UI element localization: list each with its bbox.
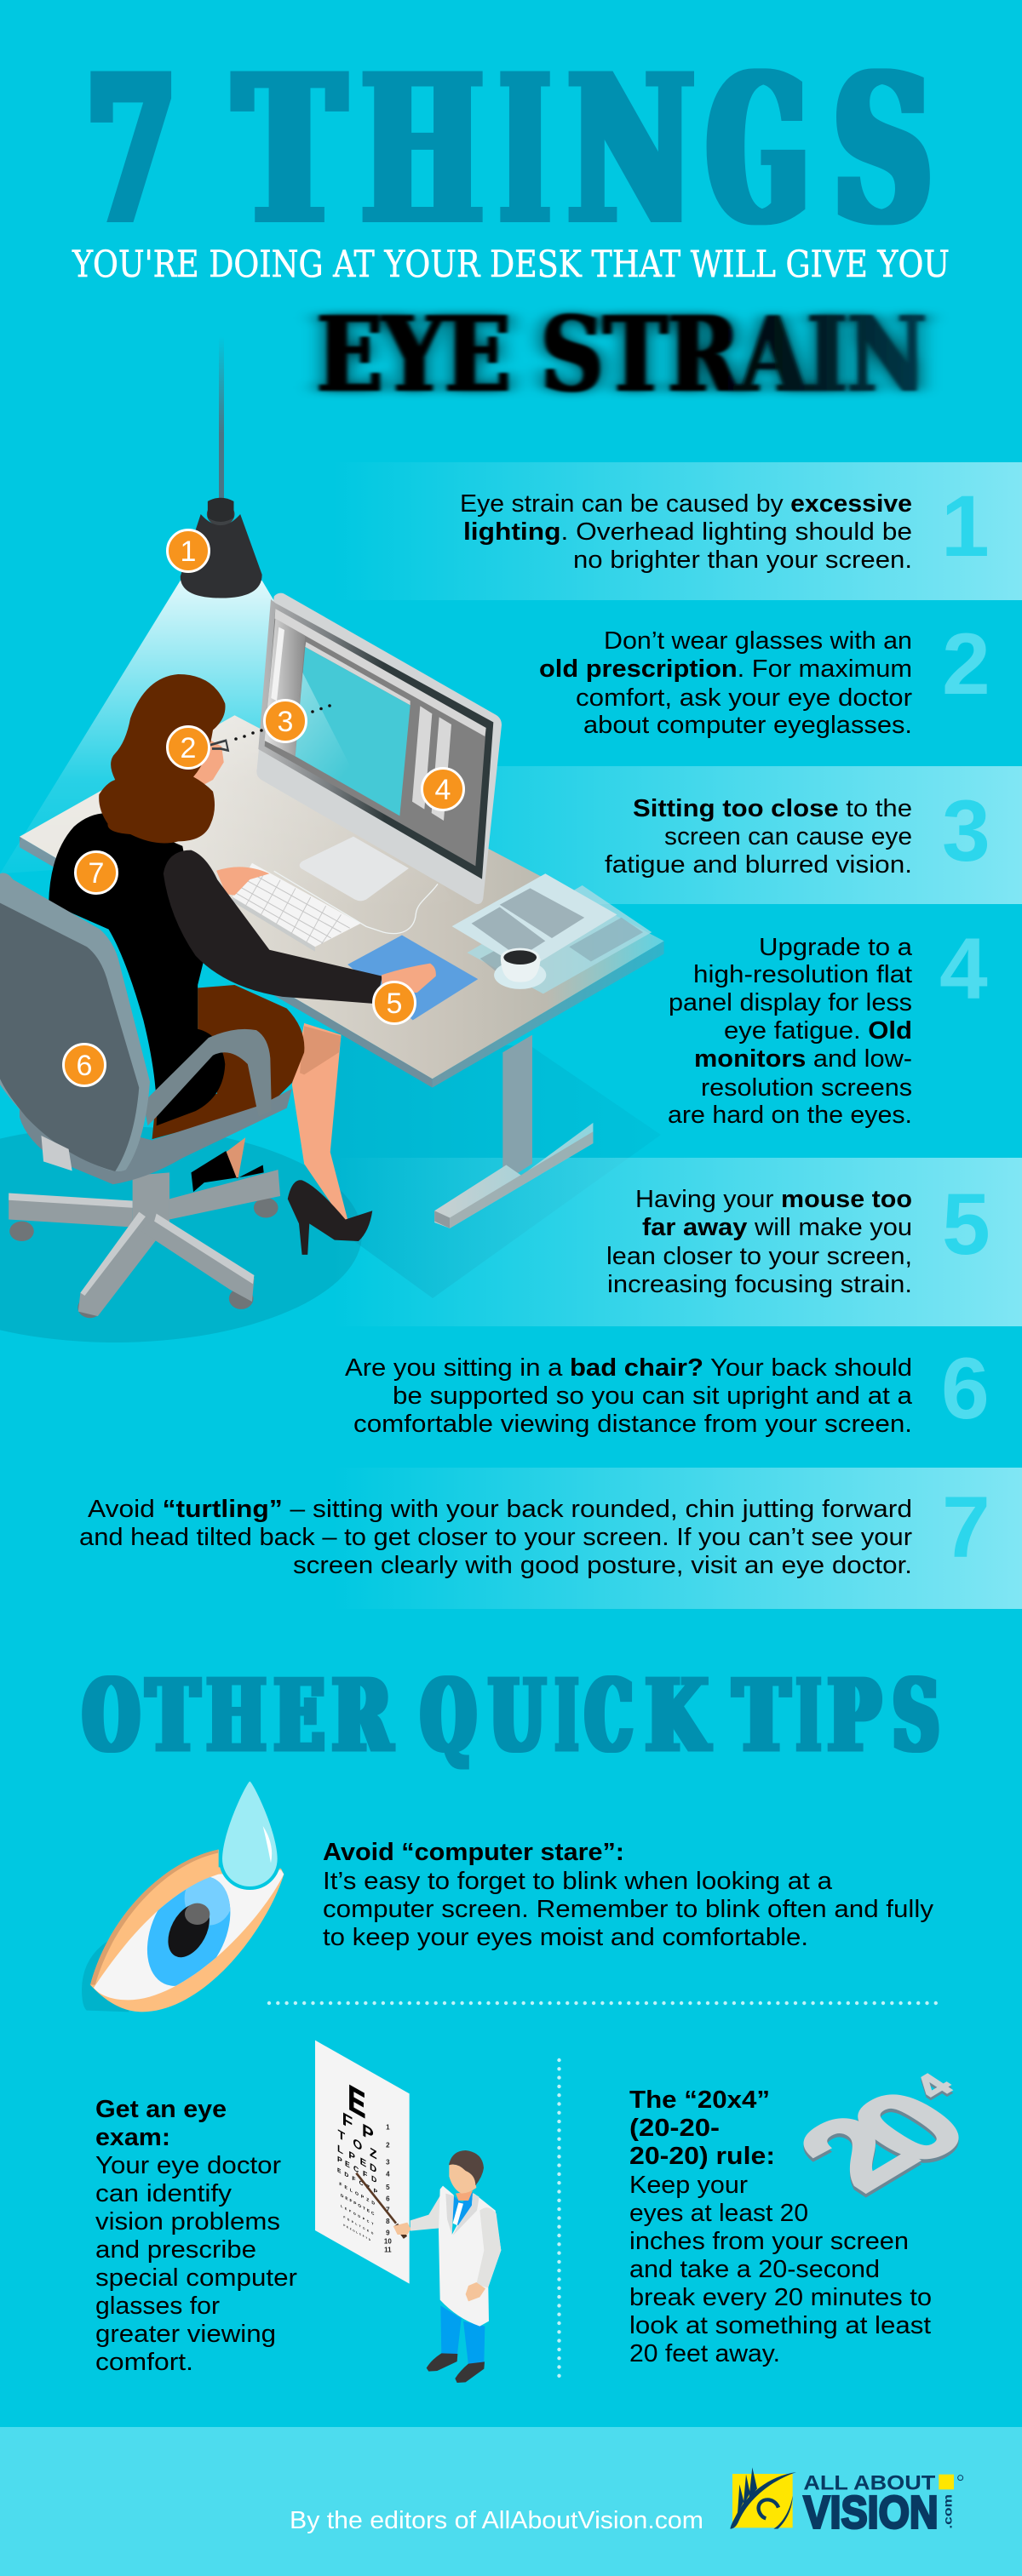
doctor xyxy=(356,2150,501,2383)
panel: tip 4: Upgrade to a xyxy=(759,934,913,961)
badge 5 xyxy=(373,982,416,1023)
panel: tip 2: Don’t wear glasses with an xyxy=(604,627,912,655)
heading: other quick tips: S xyxy=(893,1658,939,1774)
text: 20x4 rule: (20-20- xyxy=(629,2115,720,2142)
badge 1: 1 xyxy=(181,535,196,568)
eye chart: 4 xyxy=(386,2171,390,2178)
text: 20x4 rule: inches from your screen xyxy=(629,2228,909,2255)
title: 7 things: I xyxy=(502,31,548,269)
eye chart xyxy=(315,2041,410,2284)
panel: tip 4: are hard on the eyes. xyxy=(668,1102,912,1129)
text: 20x4 rule: 20 feet away. xyxy=(629,2340,780,2367)
eye chart: DEFPOTEC xyxy=(341,2193,375,2217)
logo: all about vision: VISION xyxy=(803,2487,939,2538)
eye chart: 5 xyxy=(386,2184,390,2191)
eye chart: 8 xyxy=(386,2218,390,2225)
text: get an eye exam: Get an eye xyxy=(95,2096,227,2123)
desk legs xyxy=(434,1035,593,1228)
panel: tip 2: 2 xyxy=(942,615,990,713)
eye chart: LEFODPCT xyxy=(341,2204,374,2226)
heading: other quick tips: H xyxy=(208,1658,265,1774)
heading: other quick tips: T xyxy=(147,1658,198,1774)
title: 7 things xyxy=(88,31,931,269)
panel: tip 5: 5 xyxy=(942,1176,990,1273)
chair base xyxy=(9,1170,280,1318)
text: avoid computer stare: computer screen. Remember to blink often and fully xyxy=(323,1896,934,1923)
eye chart: TOZ xyxy=(338,2127,377,2162)
panel: tip 4: panel display for less xyxy=(669,989,912,1016)
lamp xyxy=(181,498,262,598)
badge 1 xyxy=(167,530,210,572)
heading: other quick tips: Q xyxy=(422,1658,475,1774)
panel: tip 7: Avoid “turtling” – sitting with your back rounded, chin jutting forward xyxy=(88,1496,912,1523)
eye chart: FELOPZD xyxy=(339,2182,375,2207)
badge 2: 2 xyxy=(181,732,196,764)
text: get an eye exam: comfort. xyxy=(95,2349,193,2376)
heading: other quick tips: P xyxy=(829,1658,880,1774)
eye chart: FP xyxy=(342,2108,374,2146)
panel: tip 4: monitors and low- xyxy=(694,1045,912,1073)
logo: all about vision: .com xyxy=(940,2494,954,2529)
eye chart: LPED xyxy=(337,2143,376,2176)
papers xyxy=(452,873,652,993)
text: 20x4 rule: 20-20) rule: xyxy=(629,2143,775,2170)
monitor body xyxy=(256,593,502,904)
title: 7 things: 7 xyxy=(88,31,175,269)
monitor screen xyxy=(265,609,486,866)
icon: eye with drop xyxy=(82,1782,284,2012)
panel: tip 7: 7 xyxy=(942,1479,990,1576)
desk xyxy=(20,715,664,1088)
panel: tip 5 xyxy=(332,1158,1022,1326)
text: 20x4 rule: Keep your xyxy=(629,2172,748,2199)
woman: front leg xyxy=(292,1023,347,1222)
text: get an eye exam: vision problems xyxy=(95,2208,280,2235)
woman: hair xyxy=(99,674,226,843)
heading: other quick tips: E xyxy=(275,1658,324,1774)
heading: other quick tips xyxy=(83,1658,939,1774)
eye chart: 7 xyxy=(386,2207,390,2214)
monitor xyxy=(256,593,502,934)
icon: 20 to the fourth: 2 xyxy=(766,2094,945,2209)
icon: 20 to the fourth: 4 xyxy=(904,2067,963,2105)
keyboard xyxy=(233,863,360,952)
panel: tip 7: screen clearly with good posture, visit an eye doctor. xyxy=(293,1552,912,1579)
text: avoid computer stare xyxy=(323,1839,934,1951)
eye chart: 11 xyxy=(384,2246,392,2253)
heading: other quick tips: O xyxy=(83,1658,139,1774)
eye chart: 10 xyxy=(384,2237,392,2245)
heading: other quick tips: I xyxy=(798,1658,819,1774)
badge 3 xyxy=(264,700,307,742)
badge 4: 4 xyxy=(435,774,451,806)
panel: tip 6 xyxy=(345,1340,990,1438)
panel: tip 7: and head tilted back – to get closer to your screen. If you can’t see your xyxy=(79,1524,912,1551)
logo: all about vision xyxy=(730,2467,963,2538)
eye chart: 2 xyxy=(386,2142,390,2150)
woman: arm xyxy=(164,850,382,1004)
panel: tip 5: increasing focusing strain. xyxy=(607,1271,912,1298)
icon: lamp cord xyxy=(219,336,224,500)
text: get an eye exam: greater viewing xyxy=(95,2321,276,2348)
panel: tip 1: no brighter than your screen. xyxy=(573,547,912,574)
panel: tip 4 xyxy=(668,920,988,1129)
text: 20x4 rule: break every 20 minutes to xyxy=(629,2284,932,2311)
illustration: desk and accessories xyxy=(0,581,664,1228)
panel: tip 1 xyxy=(332,462,1022,600)
illustration: lamp, woman and chair xyxy=(0,498,436,1318)
heading: other quick tips: T xyxy=(734,1658,789,1774)
woman: right hand xyxy=(382,964,436,993)
eye chart: 6 xyxy=(386,2195,390,2202)
panel: tip 3: screen can cause eye xyxy=(664,823,912,850)
text: get an eye exam xyxy=(95,2096,297,2376)
monitor cable xyxy=(274,871,438,934)
panel: tip 6: comfortable viewing distance from your screen. xyxy=(353,1411,912,1438)
badge 6 xyxy=(63,1044,106,1086)
panel: tip 5: Having your mouse too xyxy=(635,1186,912,1213)
text: 20x4 rule: eyes at least 20 xyxy=(629,2200,808,2227)
dotted line: eye to screen xyxy=(234,704,331,741)
text: avoid computer stare: Avoid “computer stare”: xyxy=(323,1839,624,1866)
footer band xyxy=(0,2427,1022,2576)
woman: front shoe xyxy=(288,1180,372,1255)
panel: tip 1: lighting . Overhead lighting should be xyxy=(463,518,912,546)
badge 2 xyxy=(167,727,210,768)
badge 7: 7 xyxy=(89,857,104,890)
badge 3: 3 xyxy=(278,706,293,738)
badge 4 xyxy=(422,768,463,810)
woman: left hand xyxy=(216,867,269,896)
icon: 20 to the fourth: 2 xyxy=(766,2098,945,2213)
text: avoid computer stare: It’s easy to forget to blink when looking at a xyxy=(323,1868,833,1895)
panel: tip 4: resolution screens xyxy=(701,1074,912,1102)
panel: tip 3: fatigue and blurred vision. xyxy=(605,851,912,879)
eye chart: PECFD xyxy=(337,2155,376,2185)
eye chart: FDPLTCEO xyxy=(343,2215,374,2235)
text: get an eye exam: exam: xyxy=(95,2124,170,2151)
panel: tip 1: Eye strain can be caused by excessive xyxy=(460,490,912,518)
panel: tip 6: 6 xyxy=(941,1340,990,1437)
text: avoid computer stare: to keep your eyes moist and comfortable. xyxy=(323,1924,808,1951)
woman: skirt xyxy=(152,985,304,1139)
chair back xyxy=(0,873,150,1171)
badge 7 xyxy=(75,851,118,894)
title: 7 things: N xyxy=(570,31,692,269)
badge 6: 6 xyxy=(77,1050,92,1082)
text: get an eye exam: can identify xyxy=(95,2180,233,2207)
text: get an eye exam: and prescribe xyxy=(95,2236,256,2264)
panel: tip 1: 1 xyxy=(941,478,990,575)
panel: tip 4: 4 xyxy=(939,920,988,1017)
monitor bezel xyxy=(258,599,493,879)
text: get an eye exam: glasses for xyxy=(95,2293,220,2320)
title: 7 things: G xyxy=(709,31,807,269)
logo: all about vision: ALL ABOUT xyxy=(803,2471,936,2494)
badge 5: 5 xyxy=(387,987,402,1020)
text: 20x4 rule: look at something at least xyxy=(629,2312,931,2339)
panel: tip 4: high-resolution flat xyxy=(693,961,912,988)
panel: tip 3 xyxy=(332,766,1022,904)
chair seat xyxy=(20,1089,292,1184)
panel: tip 5: far away will make you xyxy=(642,1214,912,1241)
heading: other quick tips: K xyxy=(646,1658,709,1774)
light beam xyxy=(0,581,452,947)
title: 7 things: H xyxy=(364,31,481,269)
panel: tip 2: comfort, ask your eye doctor xyxy=(576,684,912,712)
woman: other leg and shoe xyxy=(191,1137,264,1192)
coffee cup xyxy=(494,948,546,989)
eye chart: PEZOLCFTD xyxy=(343,2224,371,2242)
panel: tip 3: Sitting too close to the xyxy=(633,795,912,822)
floor shadow under desk xyxy=(304,1030,661,1298)
woman: torso xyxy=(49,813,225,1125)
woman: face and glasses xyxy=(193,739,228,786)
panel: tip 7 xyxy=(79,1468,1022,1609)
monitor stand xyxy=(300,837,409,901)
panel: tip 6: be supported so you can sit upright and at a xyxy=(393,1382,913,1410)
icon: 20 to the fourth xyxy=(766,2067,998,2213)
mouse pad xyxy=(347,936,478,1020)
panel: tip 2: about computer eyeglasses. xyxy=(583,712,912,739)
text: 20x4 rule: The “20x4” xyxy=(629,2087,770,2114)
eye chart: 1 xyxy=(386,2123,390,2131)
heading: other quick tips: U xyxy=(490,1658,544,1774)
icon: doctor with eye chart xyxy=(315,2041,501,2383)
panel: tip 5: lean closer to your screen, xyxy=(606,1243,912,1270)
heading: other quick tips: I xyxy=(557,1658,577,1774)
eye chart: 3 xyxy=(386,2159,390,2167)
text: 20x4 rule: and take a 20-second xyxy=(629,2256,880,2283)
icon: 20 to the fourth: 0 xyxy=(819,2069,998,2184)
heading: other quick tips: C xyxy=(586,1658,632,1774)
text: get an eye exam: Your eye doctor xyxy=(95,2152,281,2179)
floor shadow under chair xyxy=(0,1126,362,1342)
eye chart: EDFCZP xyxy=(337,2167,377,2195)
footer credit: By the editors of AllAboutVision.com xyxy=(290,2507,703,2534)
title: 7 things: S xyxy=(835,31,931,269)
eye chart: E xyxy=(347,2076,365,2127)
eye chart: 9 xyxy=(386,2229,390,2236)
title: 7 things: T xyxy=(236,31,343,269)
panel: tip 2 xyxy=(539,615,990,739)
icon: 20 to the fourth: 0 xyxy=(819,2073,998,2188)
panel: tip 6: Are you sitting in a bad chair? Your back should xyxy=(345,1354,912,1382)
heading: other quick tips: R xyxy=(333,1658,392,1774)
chair armrest xyxy=(143,1029,272,1125)
text: 20x4 rule xyxy=(629,2087,932,2367)
panel: tip 3: 3 xyxy=(942,782,990,879)
icon: 20 to the fourth: 4 xyxy=(904,2069,963,2108)
panel: tip 4: eye fatigue. Old xyxy=(724,1017,912,1045)
text: get an eye exam: special computer xyxy=(95,2264,297,2292)
panel: tip 2: old prescription . For maximum xyxy=(539,655,912,683)
